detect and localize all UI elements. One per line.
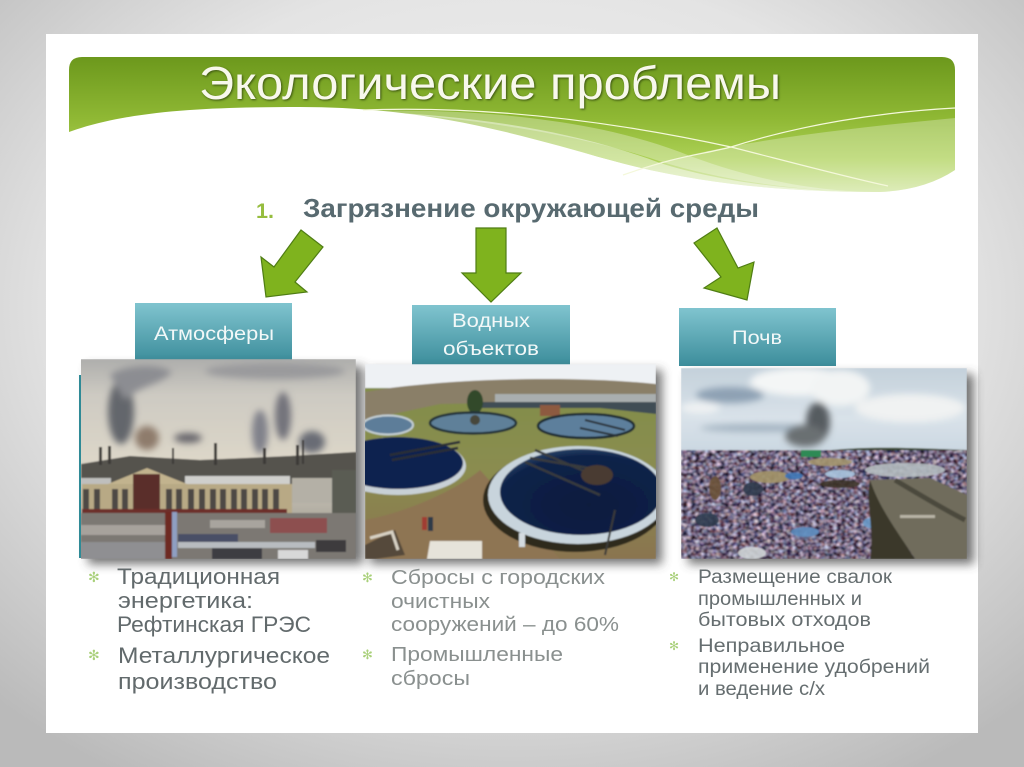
text block: soil bullets: и ведение с/х xyxy=(698,679,826,700)
text block: water bullets xyxy=(362,566,619,690)
photo shadows xyxy=(88,366,974,564)
text block: water bullets: очистных xyxy=(391,590,491,613)
text block: atmosphere bullets: Металлургическое xyxy=(118,643,330,668)
text block: soil bullets: промышленных и xyxy=(698,589,862,610)
text block: atmosphere bullets: ✻ xyxy=(88,570,100,586)
foreground xyxy=(427,541,482,559)
shadow under big tank xyxy=(482,468,656,552)
box: water bodies xyxy=(412,305,570,365)
photo: landfill xyxy=(680,368,967,559)
right big tank xyxy=(488,446,668,544)
box: soils: Почв xyxy=(732,328,782,349)
arrow: left xyxy=(261,230,323,297)
box: soils xyxy=(679,308,836,366)
text block: water bullets: ✻ xyxy=(362,571,373,586)
text block: water bullets: Промышленные xyxy=(391,643,563,666)
arrow: center xyxy=(462,228,521,302)
left big tank xyxy=(365,436,467,496)
text block: atmosphere bullets: производство xyxy=(118,669,277,694)
text block: soil bullets: ✻ xyxy=(669,570,679,584)
photo: industrial smog xyxy=(79,359,356,559)
box: atmosphere: Атмосферы xyxy=(154,324,274,345)
text block: atmosphere bullets: Традиционная xyxy=(117,564,280,589)
text block: atmosphere bullets: Рефтинская ГРЭС xyxy=(117,612,311,637)
heading: Загрязнение окружающей среды xyxy=(303,193,759,223)
text block: soil bullets: Неправильное xyxy=(698,636,845,657)
text block: water bullets: сооружений – до 60% xyxy=(391,613,619,636)
text block: soil bullets xyxy=(669,567,930,700)
small tanks xyxy=(363,416,413,434)
arrow: right xyxy=(694,228,754,300)
title banner xyxy=(69,57,955,192)
text block: soil bullets: бытовых отходов xyxy=(698,610,871,631)
text block: water bullets: Сбросы с городских xyxy=(391,566,606,589)
heading number: 1. xyxy=(256,200,274,223)
text block: soil bullets: ✻ xyxy=(669,639,679,653)
title: Экологические проблемы xyxy=(199,57,781,109)
text block: water bullets: сбросы xyxy=(391,667,470,690)
box: atmosphere xyxy=(135,303,292,362)
box: water bodies: Водных xyxy=(452,311,531,332)
box: water bodies: объектов xyxy=(443,339,539,360)
photo: treatment plant xyxy=(365,364,656,559)
text block: soil bullets: применение удобрений xyxy=(698,657,930,678)
text block: atmosphere bullets: ✻ xyxy=(88,648,100,664)
text block: water bullets: ✻ xyxy=(362,648,373,663)
text block: atmosphere bullets: энергетика: xyxy=(118,588,253,613)
text block: atmosphere bullets xyxy=(88,564,330,694)
text block: soil bullets: Размещение свалок xyxy=(698,567,893,588)
